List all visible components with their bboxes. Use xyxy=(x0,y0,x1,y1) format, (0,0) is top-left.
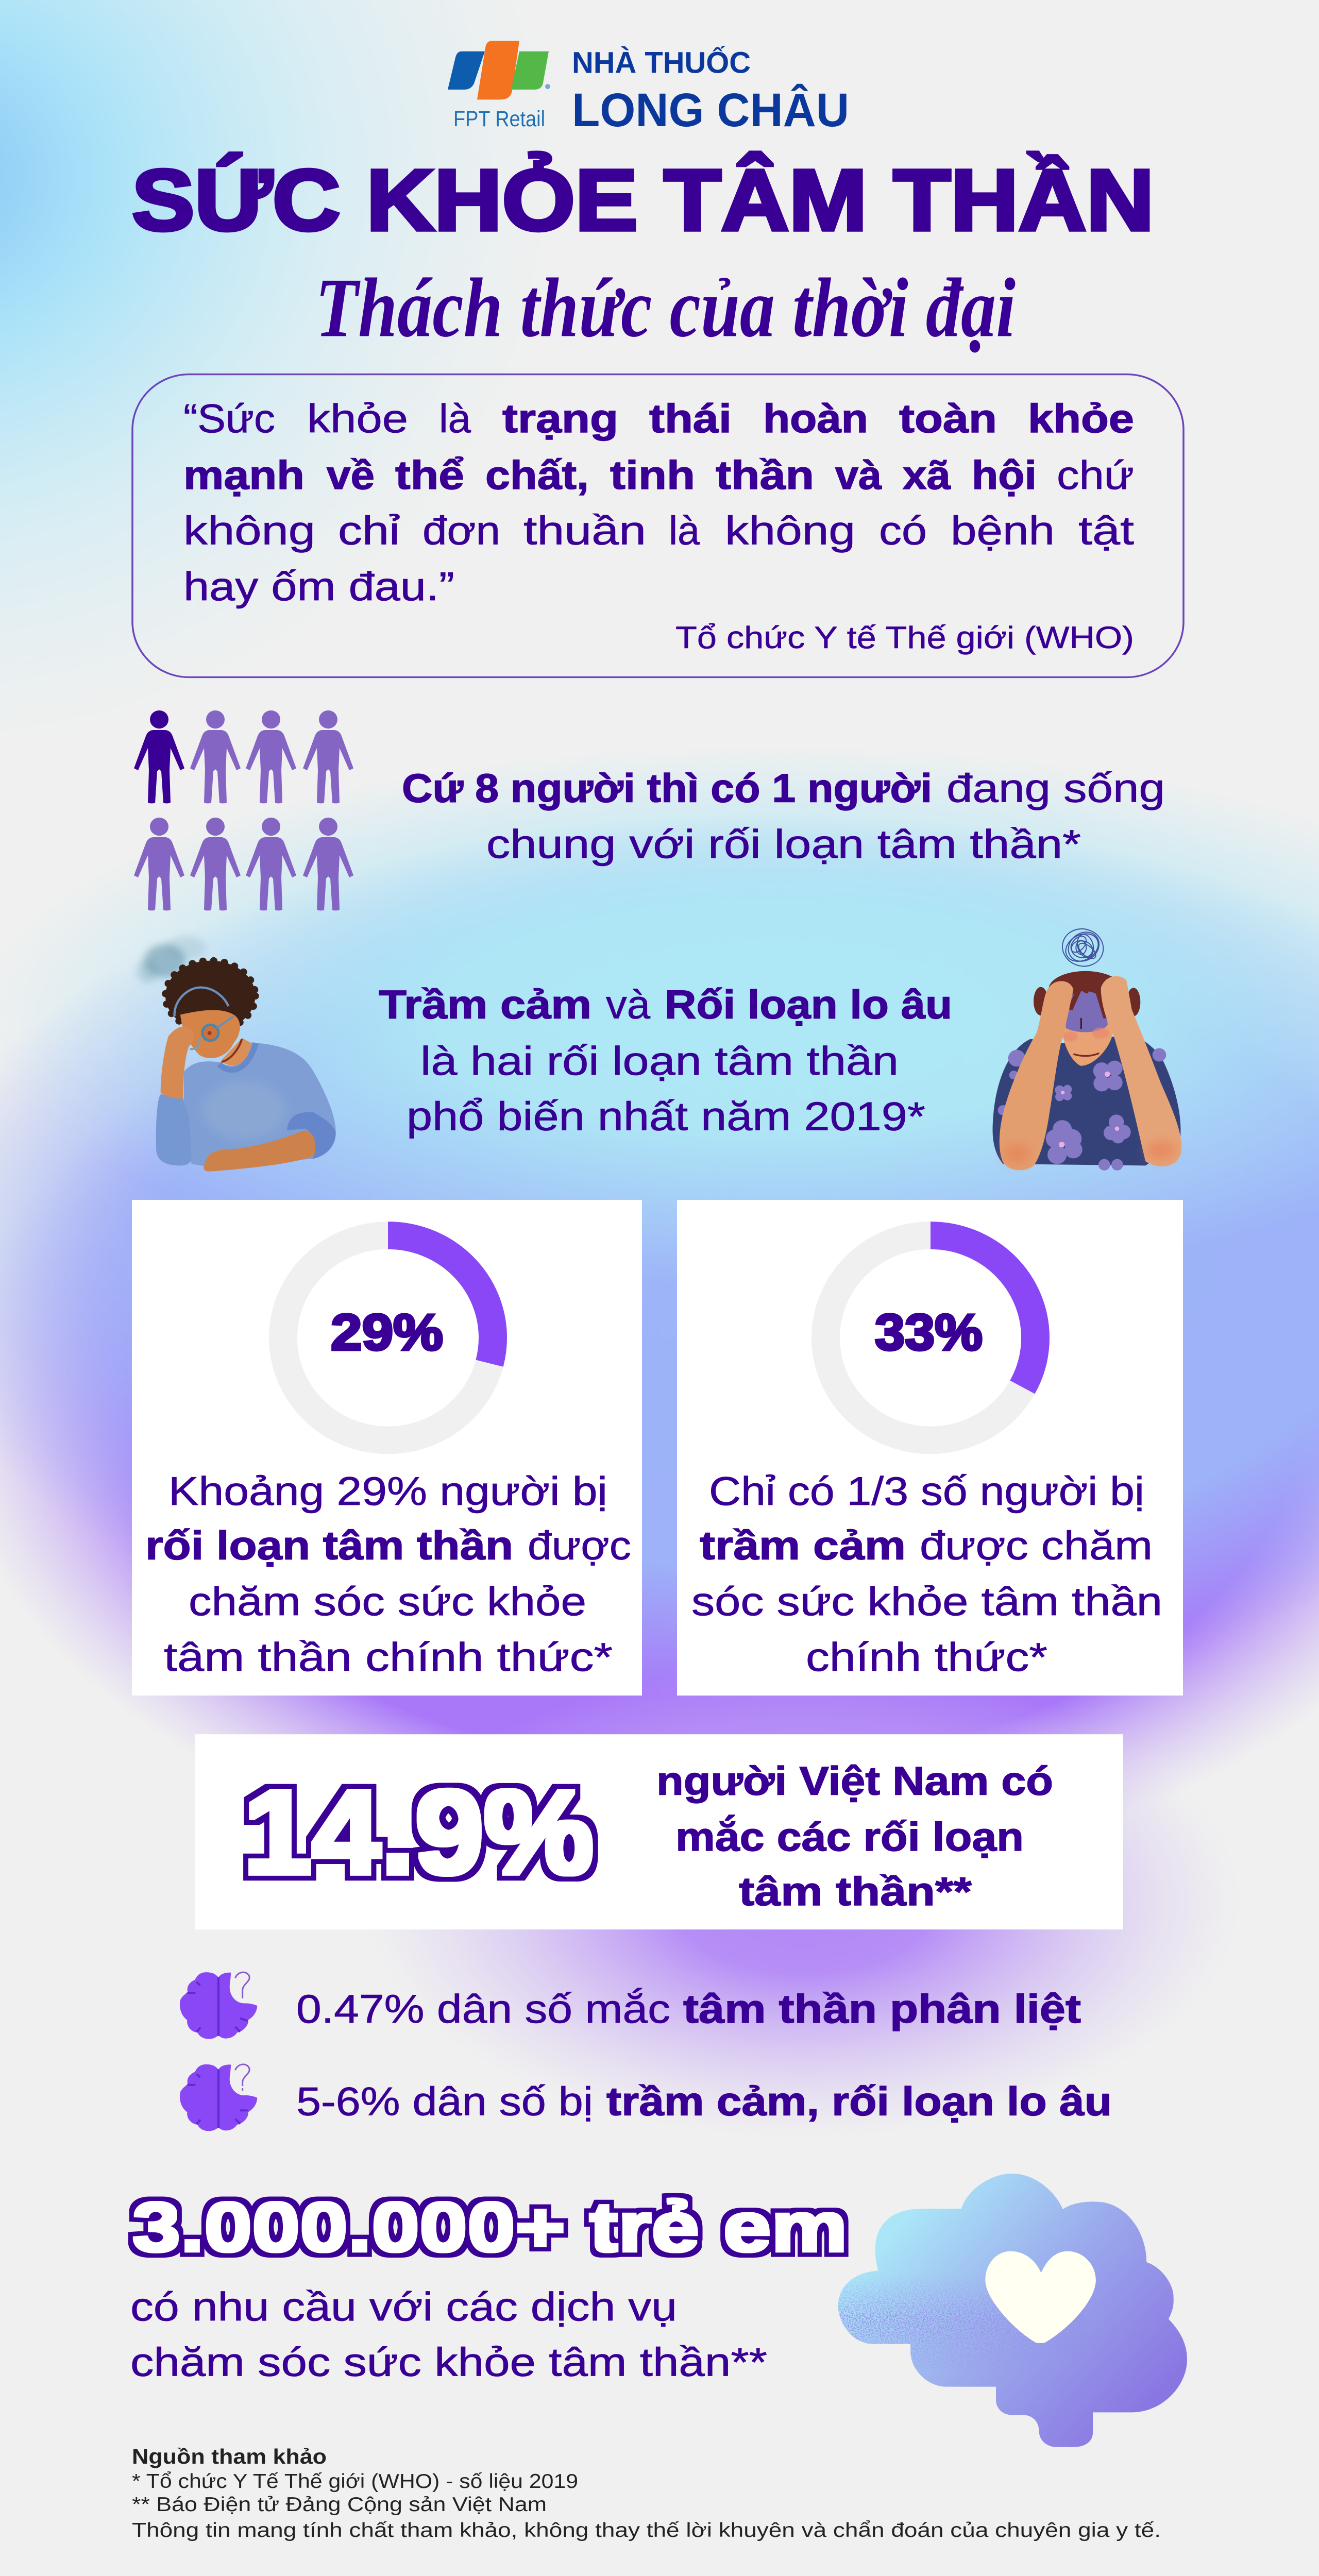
panel: 33% card xyxy=(677,1200,1183,1696)
footer sources: ** Báo Điện tử Đảng Cộng sản Việt Nam xyxy=(132,2493,547,2516)
quote text: trạng xyxy=(502,396,618,441)
lower forearm xyxy=(204,1130,315,1172)
card text: chăm sóc sức khỏe xyxy=(189,1579,586,1624)
text: depression anxiety statistic xyxy=(296,2078,1112,2124)
heading: three million children: 3.000.000+ trẻ em xyxy=(132,2189,848,2266)
footer sources: Nguồn tham khảo xyxy=(132,2445,327,2468)
text: children need services xyxy=(130,2284,767,2384)
dress xyxy=(993,1037,1180,1165)
text: children need services: chăm sóc sức khỏe tâm thần** xyxy=(130,2339,767,2384)
text: depression and anxiety: và xyxy=(606,981,650,1027)
text: depression and anxiety xyxy=(379,981,952,1139)
icon group: eight people xyxy=(134,710,353,910)
title: SỨC KHỎE TÂM THẦN xyxy=(132,152,1154,249)
quote text: “Sức xyxy=(183,396,275,441)
illustration: woman with glasses holding her head xyxy=(138,936,336,1172)
glasses xyxy=(190,1016,233,1049)
quote text: và xyxy=(835,452,882,498)
quote text: thái xyxy=(649,396,732,441)
card text: Khoảng 29% người bị xyxy=(168,1468,607,1514)
arms and hands xyxy=(1000,981,1073,1170)
footer sources: * Tổ chức Y Tế Thế giới (WHO) - số liệu 2019 xyxy=(132,2470,578,2493)
donut chart 33% xyxy=(825,1235,1036,1440)
quote text: tật xyxy=(1078,507,1134,553)
donut chart 33%: 33% xyxy=(875,1304,983,1361)
dress flowers xyxy=(998,1048,1166,1171)
text: children need services: có nhu cầu với các dịch vụ xyxy=(130,2284,677,2329)
statistic text xyxy=(656,1758,1053,1914)
text: depression and anxiety: Rối loạn lo âu xyxy=(665,981,952,1027)
illustration: person with scribble clutching head xyxy=(993,923,1181,1171)
quote text: thuần xyxy=(523,507,646,553)
panel: 14.9% statistic xyxy=(195,1734,1123,1929)
card text: Chỉ có 1/3 số người bị xyxy=(709,1468,1144,1514)
quote text: đơn xyxy=(422,507,500,553)
text: depression anxiety statistic: trầm cảm, rối loạn lo âu xyxy=(606,2078,1112,2124)
quote text: hoàn xyxy=(763,396,868,441)
text: one in eight people xyxy=(402,765,1165,867)
collar xyxy=(219,1043,256,1070)
text: one in eight people: đang sống xyxy=(946,765,1165,810)
face xyxy=(1063,993,1113,1066)
text: depression and anxiety: Trầm cảm xyxy=(379,981,591,1027)
quote text: là xyxy=(439,396,471,441)
headband xyxy=(175,988,228,1016)
card text xyxy=(691,1468,1162,1680)
icon: brain with question mark xyxy=(180,1972,257,2039)
logo: FPT Retail Long Chau xyxy=(448,41,849,137)
quote text: không xyxy=(725,507,855,553)
text: depression anxiety statistic: 5-6% dân số bị xyxy=(296,2078,593,2124)
text: one in eight people: chung với rối loạn tâm thần* xyxy=(486,821,1081,867)
icon: brain with question mark xyxy=(180,2064,257,2131)
card text: được xyxy=(528,1522,631,1568)
text: FPT Retail: FPT Retail xyxy=(453,107,545,131)
panel: WHO quote xyxy=(132,375,1183,677)
remaining seven people xyxy=(134,710,353,910)
quote text: không xyxy=(183,507,315,553)
scribble xyxy=(1057,923,1109,972)
icon: FPT mark xyxy=(448,41,550,99)
smoke cloud xyxy=(138,936,206,983)
statistic text: mắc các rối loạn xyxy=(675,1814,1024,1859)
footer sources: Thông tin mang tính chất tham khảo, không thay thế lời khuyên và chẩn đoán của chuyên gia y tế. xyxy=(132,2519,1161,2541)
quote text: khỏe xyxy=(307,396,408,441)
card text: chính thức* xyxy=(806,1634,1047,1680)
card text: sóc sức khỏe tâm thần xyxy=(691,1579,1162,1624)
hair xyxy=(165,961,256,1031)
statistic text: tâm thần** xyxy=(739,1869,972,1914)
quote text: chứ xyxy=(1057,452,1134,498)
quote text: có xyxy=(879,507,927,553)
quote text: hội xyxy=(972,452,1037,498)
quote text: bệnh xyxy=(951,507,1055,553)
quote text: thể xyxy=(395,452,464,498)
quote text: về xyxy=(327,452,375,498)
card text xyxy=(145,1468,631,1680)
big number 14.9%: 14.9% xyxy=(243,1766,594,1899)
quote text: khỏe xyxy=(1028,396,1134,441)
person highlighted xyxy=(134,710,184,803)
face and neck xyxy=(222,1038,251,1065)
text: schizophrenia statistic: tâm thần phân liệt xyxy=(683,1986,1081,2031)
card text: trầm cảm xyxy=(700,1522,906,1568)
text: one in eight people: Cứ 8 người thì có 1 người xyxy=(402,765,932,810)
quote attribution: Tổ chức Y tế Thế giới (WHO) xyxy=(675,620,1134,655)
card text: được chăm xyxy=(920,1522,1153,1568)
footer sources xyxy=(132,2445,1161,2541)
hair xyxy=(1034,971,1140,1016)
quote text: mạnh xyxy=(183,452,305,498)
quote text: tinh xyxy=(610,452,695,498)
quote text: toàn xyxy=(899,396,997,441)
quote text: chất, xyxy=(485,452,589,498)
quote text: thần xyxy=(716,452,814,498)
donut chart 29%: 29% xyxy=(331,1304,443,1361)
heart xyxy=(985,2251,1096,2343)
text: depression and anxiety: phổ biến nhất năm 2019* xyxy=(407,1093,925,1139)
quote text: là xyxy=(669,507,700,553)
text: depression and anxiety: là hai rối loạn tâm thần xyxy=(420,1038,899,1083)
donut chart 29% xyxy=(283,1235,493,1440)
text: Nha Thuoc: NHÀ THUỐC xyxy=(572,45,751,79)
icon: brain with heart xyxy=(834,2174,1187,2447)
quote text xyxy=(183,396,1134,609)
card text: rối loạn tâm thần xyxy=(145,1522,513,1568)
subtitle: Thách thức của thời đại xyxy=(315,261,1016,354)
text: schizophrenia statistic: 0.47% dân số mắc xyxy=(296,1986,670,2031)
statistic text: người Việt Nam có xyxy=(656,1758,1053,1803)
quote text: chỉ xyxy=(338,507,400,553)
text: Long Chau: LONG CHÂU xyxy=(572,83,849,137)
flower centres xyxy=(1059,1072,1119,1147)
raised arm and hand xyxy=(161,1027,194,1098)
sweater xyxy=(184,1042,336,1166)
speckle texture xyxy=(834,2273,1084,2369)
text: schizophrenia statistic xyxy=(296,1986,1081,2031)
quote text: xã xyxy=(903,452,951,498)
card text: tâm thần chính thức* xyxy=(164,1634,613,1680)
quote text: hay ốm đau.” xyxy=(183,564,454,609)
panel: 29% card xyxy=(132,1200,642,1696)
